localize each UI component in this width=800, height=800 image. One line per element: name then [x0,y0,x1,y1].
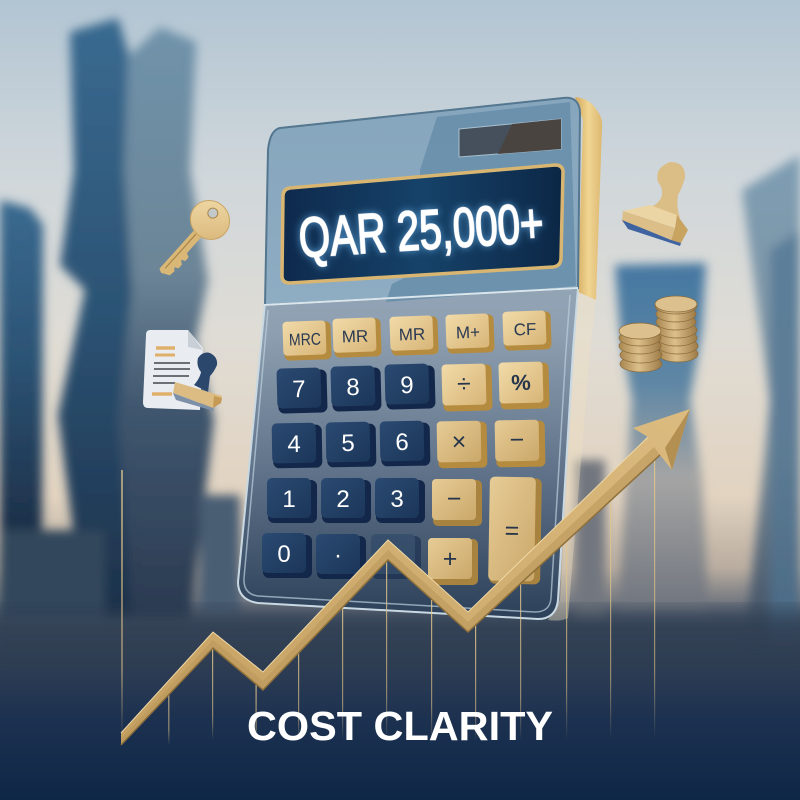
key 4 [272,423,322,468]
key minus second [432,479,482,526]
key 5 [326,422,376,467]
key 2 [321,478,371,523]
key MRC [282,320,332,361]
gold operator keys [428,361,550,585]
key 0: 0 [277,541,291,568]
key plus: + [443,545,457,573]
icon: gold key [147,192,238,287]
key 6 [380,421,430,466]
key decimal point [316,534,366,579]
key 3: 3 [390,486,404,513]
navy number keys [262,363,436,579]
key equals: = [504,517,520,545]
key M+ [445,313,495,354]
key 5: 5 [341,430,355,457]
divider highlight [264,288,578,305]
document lines [152,348,190,394]
key plus [428,538,478,585]
key CF: CF [513,320,537,339]
solar panel [459,119,561,157]
stamp on document [173,353,222,411]
key minus [495,420,545,467]
key 8 [330,365,382,412]
key equals [488,477,542,584]
title: COST CLARITY [247,703,553,749]
calculator [238,97,602,621]
key 9 [384,363,436,410]
calculator gold side edge [548,97,602,621]
key 0 [262,533,312,578]
key percent: % [511,370,531,395]
key 3 [375,478,425,523]
key divide [441,363,493,412]
right coin stack [655,296,698,362]
key 1 [267,478,317,523]
icon: coin stacks [619,296,698,372]
key 7 [276,367,328,414]
blank key [371,534,421,579]
gold function keys row [282,310,552,361]
icon: gold stamp [622,162,688,246]
display screen [282,165,563,283]
key 8: 8 [346,374,360,401]
key 1: 1 [282,486,296,513]
icon: document with stamp [143,330,222,411]
document sheet [143,330,203,410]
upper panel reflection [386,102,576,302]
display readout: QAR 25,000+ [297,191,545,269]
key MR [332,317,382,358]
chart guide lines [121,450,655,745]
key decimal point: · [334,542,342,569]
key M+: M+ [456,323,480,342]
glass inner bevel [244,295,570,612]
key 7: 7 [292,376,306,403]
calculator glass body [238,98,580,619]
left coin stack [619,323,662,372]
growth arrow [121,409,690,745]
key MR second: MR [398,325,426,345]
key MR second [389,315,439,356]
key 6: 6 [395,429,409,456]
key 9: 9 [400,372,414,399]
document corner fold [188,330,203,350]
key CF [502,310,552,351]
key minus second: − [447,485,461,513]
key 4: 4 [287,431,301,458]
key 2: 2 [336,486,350,513]
key divide: ÷ [457,370,471,398]
upper panel [265,98,580,305]
key percent [498,361,550,410]
key multiply [437,421,487,468]
key MRC: MRC [289,330,321,350]
key multiply: × [451,428,467,456]
key MR: MR [341,327,369,347]
key minus: − [509,426,525,454]
